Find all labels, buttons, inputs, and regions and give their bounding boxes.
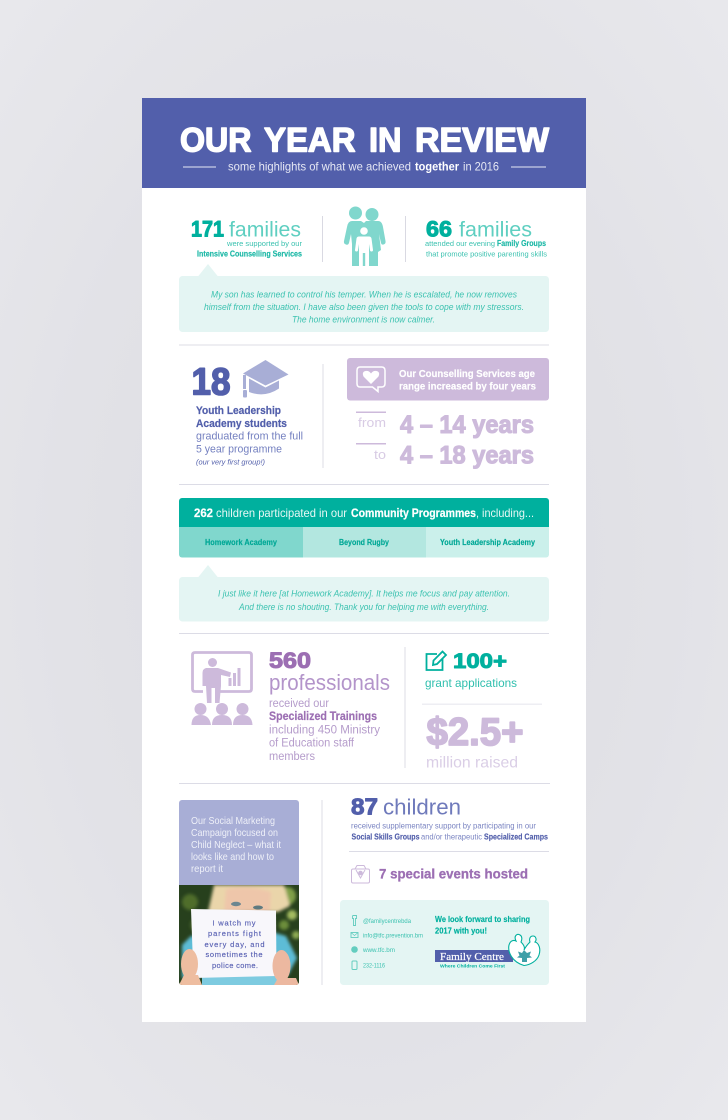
photo: girl holding sign: police come. — [212, 961, 258, 970]
stat: 100+ grants — [425, 649, 517, 690]
panel: social marketing campaign: Campaign focused on — [191, 827, 278, 839]
tab: beyond rugby: Beyond Rugby — [339, 538, 389, 547]
stat: 87 children: children — [383, 794, 461, 820]
quote: homework academy — [179, 565, 549, 622]
contact: phone: 232-1116 — [363, 962, 385, 970]
age range: to: to — [374, 447, 386, 462]
photo: girl holding sign — [179, 885, 300, 985]
icon: graduation cap — [243, 360, 288, 398]
stat: 66 families: Family Groups — [497, 239, 547, 248]
panel: age range — [347, 358, 549, 400]
text: youth leadership: (our very first group!) — [196, 458, 265, 466]
contact: website: www.tfc.bm — [362, 947, 395, 954]
quote: counselling: The home environment is now calmer. — [292, 314, 435, 324]
title: REVIEW — [415, 122, 550, 160]
title: IN — [369, 122, 402, 160]
closing message: 2017 with you! — [435, 926, 487, 936]
stat: 66 families: 66 — [426, 216, 452, 242]
stat: 560 professionals: of Education staff — [269, 738, 355, 750]
text: youth leadership: graduated from the full — [196, 430, 303, 442]
closing message: We look forward to sharing — [435, 914, 530, 924]
panel: social marketing campaign: Our Social Marketing — [191, 815, 275, 827]
stat: 560 professionals: professionals — [269, 670, 390, 695]
stat: 171 families: Intensive Counselling Services — [197, 250, 303, 258]
stat: 66 families — [425, 216, 547, 258]
icon: edit — [426, 652, 446, 670]
stat: 7 special events: 7 special events hosted — [379, 866, 528, 882]
text: youth leadership: Academy students — [196, 418, 287, 430]
contact: phone — [352, 961, 385, 970]
header banner — [142, 98, 586, 188]
panel: contact — [340, 900, 549, 985]
panel: community programmes: 262 — [194, 506, 213, 520]
stat: 66 families: families — [459, 218, 532, 242]
tab: youth leadership academy: Youth Leadership Academy — [440, 538, 536, 547]
age range: from: 4 – 14 years — [400, 411, 534, 439]
text: youth leadership: 5 year programme — [196, 444, 282, 456]
panel: community programmes: , including... — [476, 506, 534, 520]
photo: girl holding sign: I watch my — [212, 918, 256, 928]
stat: 171 families: families — [229, 218, 301, 242]
panel: age range: Our Counselling Services age — [399, 368, 535, 380]
stat: 18 graduates: 18 — [192, 362, 230, 404]
title — [180, 122, 550, 160]
stat: 560 professionals: members — [269, 751, 315, 763]
stat: 87 children: Social Skills Groups — [352, 832, 420, 842]
panel: community programmes: children participated in our — [216, 506, 347, 520]
logo: family centre: Family Centre — [440, 951, 504, 963]
age range: from: from — [358, 415, 386, 430]
quote: counselling: himself from the situation. I have also been given the tools to cope with my stressors. — [204, 301, 524, 312]
panel: social marketing campaign: looks like and how to — [191, 851, 274, 863]
title: YEAR — [264, 122, 356, 160]
quote: counselling — [179, 264, 549, 332]
panel: age range: range increased by four years — [399, 380, 536, 392]
stat: 171 families — [191, 216, 303, 258]
stat: 87 children: Specialized Camps — [484, 832, 548, 842]
contact: website — [351, 946, 395, 954]
subtitle: in 2016 — [463, 160, 499, 174]
contact: email: info@tfc.prevention.bm — [363, 932, 423, 940]
stat: $2.5+ raised: $2.5+ — [426, 711, 524, 754]
icon: presentation trainer — [192, 652, 252, 725]
quote: counselling: My son has learned to control his temper. When he is escalated, he now removes — [211, 288, 517, 300]
stat: 18 graduates — [192, 360, 303, 466]
tab: homework academy — [179, 527, 303, 558]
contact: facebook: @familycentrebda — [363, 918, 411, 925]
stat: $2.5+ raised — [426, 711, 524, 772]
panel: social marketing campaign: Child Neglect – what it — [191, 839, 281, 851]
panel: community programmes: Community Programmes — [351, 506, 476, 520]
stat: 87 children: and/or therapeutic — [421, 832, 482, 842]
closing message — [435, 914, 530, 936]
panel: social marketing campaign — [179, 800, 300, 985]
stat: 560 professionals: 560 — [269, 648, 311, 673]
tab: youth leadership academy — [426, 527, 549, 558]
subtitle: some highlights of what we achieved — [228, 160, 411, 174]
stat: 171 families: 171 — [191, 216, 224, 242]
text: youth leadership — [196, 405, 303, 466]
stat: 171 families: were supported by our — [226, 239, 302, 248]
tab: beyond rugby — [303, 527, 426, 558]
stat: 100+ grants: 100+ — [453, 649, 507, 673]
quote: homework academy: And there is no shouting. Thank you for helping me with everything. — [238, 601, 489, 612]
subtitle: together — [415, 160, 459, 174]
contact: facebook — [352, 916, 411, 926]
age range: to: 4 – 18 years — [400, 442, 534, 470]
stat: 560 professionals: Specialized Trainings — [269, 711, 377, 723]
icon: family — [344, 206, 386, 266]
stat: 66 families: that promote positive parenting skills — [426, 250, 547, 258]
logo: family centre — [435, 934, 540, 968]
photo: girl holding sign: every day, and — [204, 940, 264, 949]
stat: $2.5+ raised: million raised — [426, 754, 518, 772]
logo: family centre: Where Children Come First — [440, 964, 506, 968]
stat: 87 children: 87 — [351, 794, 378, 820]
stat: 560 professionals — [269, 648, 390, 763]
stat: 66 families: attended our evening — [425, 239, 495, 248]
quote: homework academy: I just like it here [at Homework Academy]. It helps me focus and pay attention. — [218, 588, 510, 598]
text: youth leadership: Youth Leadership — [196, 405, 281, 417]
stat: 560 professionals: received our — [269, 698, 329, 710]
page panel — [142, 98, 586, 1022]
stat: 100+ grants: grant applications — [425, 676, 517, 690]
stat: 560 professionals: including 450 Ministry — [269, 724, 380, 736]
photo: girl holding sign: sometimes the — [206, 950, 262, 959]
panel: social marketing campaign: report it — [191, 863, 223, 875]
subtitle — [183, 160, 546, 174]
tab: homework academy: Homework Academy — [205, 538, 277, 547]
panel: community programmes — [179, 498, 549, 558]
stat: 87 children: received supplementary support by participating in our — [351, 822, 536, 830]
icon: event ticket — [352, 866, 370, 883]
icon: speech bubble heart — [357, 367, 385, 392]
stat: 87 children — [351, 794, 548, 842]
photo: girl holding sign: parents fight — [208, 929, 262, 938]
title: OUR — [180, 122, 252, 160]
